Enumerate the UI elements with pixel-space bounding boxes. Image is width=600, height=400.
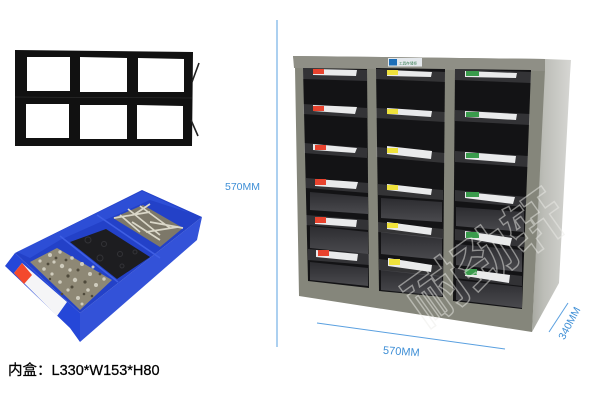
brand plate: 工具存储柜 <box>399 60 417 66</box>
dimension line: depth <box>549 303 568 332</box>
dimension label: depth: 340MM <box>556 305 583 342</box>
black rubber pile <box>70 229 150 279</box>
white label <box>14 263 67 316</box>
drawer column 3 <box>453 69 531 309</box>
bin interior <box>15 190 202 313</box>
silver rods pile <box>113 204 183 247</box>
blue parts bin with hardware <box>5 190 202 342</box>
red label tag <box>14 263 32 284</box>
watermark: 耐劲轩 <box>385 166 582 342</box>
cabinet front frame <box>293 56 545 332</box>
brand plate <box>388 58 422 66</box>
drawer colour tags <box>313 69 479 275</box>
drawer column 1 <box>303 68 369 288</box>
bin back wall <box>17 191 190 258</box>
caption: 内盒：L330*W153*H80 <box>8 362 160 379</box>
drawer lips <box>303 68 531 286</box>
dimension label: height: 570MM <box>225 181 260 193</box>
bin long side <box>80 217 202 342</box>
nuts pile <box>30 248 112 310</box>
icon: black divider frame <box>15 50 199 146</box>
cabinet <box>293 56 571 332</box>
front rim <box>5 253 80 342</box>
cabinet side panel <box>532 59 571 332</box>
bin dividers <box>60 215 160 282</box>
drawer column 2 <box>376 68 445 297</box>
dimension label: width: 570MM <box>383 345 420 359</box>
cabinet top bar <box>293 56 545 71</box>
drawer labels <box>313 69 517 283</box>
dimension line: width <box>317 323 505 349</box>
dimension line: height <box>276 20 278 347</box>
clear lower drawers <box>310 192 524 308</box>
